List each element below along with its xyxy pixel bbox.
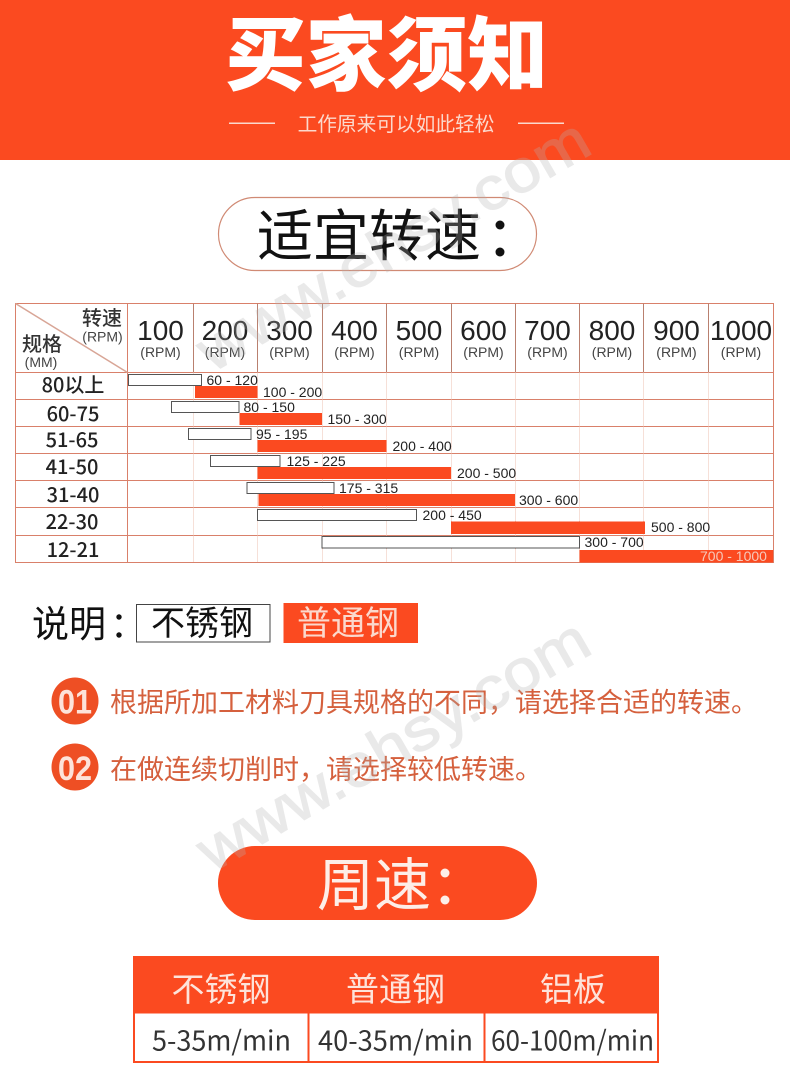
row labels — [42, 369, 104, 563]
column headers: (RPM) — [399, 344, 439, 360]
row labels: 80以上 — [42, 369, 104, 398]
column headers: 1000 — [710, 315, 772, 346]
bars: 60-75 — [172, 399, 387, 427]
column headers: (RPM) — [656, 344, 697, 360]
table values — [152, 1018, 654, 1058]
note 01: 01 — [58, 684, 92, 722]
header banner — [0, 0, 790, 160]
row labels: 12-21 — [47, 534, 99, 563]
column headers: 700 — [524, 315, 571, 346]
corner header labels: 转速 — [82, 302, 122, 331]
note 01: 根据所加工材料刀具规格的不同，请选择合适的转速。 — [110, 681, 758, 720]
row labels: 60-75 — [47, 398, 99, 427]
watermark: bottom: www.ehsy.com — [184, 605, 601, 885]
row labels: 22-30 — [46, 506, 98, 535]
table values: 60-100m/min — [491, 1018, 654, 1058]
bars: 41-50: 200 - 500 — [457, 465, 516, 481]
column headers: 400 — [331, 315, 378, 346]
column headers: (RPM) — [463, 344, 504, 360]
table headers — [172, 963, 606, 1011]
surface speed table — [133, 956, 659, 1063]
bars: 51-65: 200 - 400 — [392, 438, 452, 454]
bars: 80+ — [128, 372, 322, 400]
table headers: 普通钢 — [346, 963, 445, 1011]
column headers: 800 — [589, 315, 635, 346]
bars: 80+: 100 - 200 — [263, 384, 322, 400]
table values: 5-35m/min — [152, 1018, 291, 1058]
column headers: 100 — [137, 315, 184, 346]
row labels: 41-50 — [46, 451, 98, 480]
corner header labels — [22, 302, 123, 370]
column headers — [137, 315, 772, 360]
column headers: 200 — [202, 315, 248, 346]
bars: 51-65 — [188, 426, 452, 454]
column headers: (RPM) — [140, 344, 181, 360]
column headers: (RPM) — [205, 344, 245, 360]
column headers: 500 — [396, 315, 442, 346]
heading pill: surface speed: 周速 — [317, 840, 431, 922]
bars: 60-75: 80 - 150 — [244, 399, 295, 415]
note 02: 在做连续切削时，请选择较低转速。 — [110, 748, 542, 787]
column headers: (RPM) — [334, 344, 375, 360]
corner header labels: (RPM) — [82, 328, 123, 344]
bars: 80+: 60 - 120 — [206, 372, 258, 388]
bars: 22-30: 200 - 450 — [422, 507, 482, 523]
column headers: 900 — [653, 315, 700, 346]
column headers: (RPM) — [592, 344, 632, 360]
table headers: 不锈钢 — [172, 963, 270, 1011]
corner header labels: (MM) — [25, 354, 57, 370]
note 02: 02 — [58, 750, 92, 788]
column headers: (RPM) — [721, 344, 761, 360]
table grid — [16, 304, 774, 562]
table values: 40-35m/min — [318, 1018, 473, 1058]
bars: 41-50: 125 - 225 — [286, 453, 346, 469]
row labels: 31-40 — [47, 479, 99, 508]
column headers: 600 — [460, 315, 507, 346]
heading pill: suitable speed: 适宜转速 — [257, 192, 481, 273]
column headers: (RPM) — [269, 344, 310, 360]
bars: 12-21: 300 - 700 — [584, 534, 644, 550]
column headers: 300 — [266, 315, 313, 346]
bars: 12-21: 700 - 1000 — [700, 548, 767, 564]
bars: 51-65: 95 - 195 — [256, 426, 308, 442]
row labels: 51-65 — [46, 424, 98, 453]
bars: 60-75: 150 - 300 — [328, 411, 387, 427]
legend: 说明 — [32, 594, 106, 648]
bars: 31-40 — [247, 480, 578, 508]
corner header labels: 规格 — [22, 328, 62, 357]
bars: 31-40: 175 - 315 — [339, 480, 398, 496]
bars: 22-30: 500 - 800 — [651, 519, 710, 535]
legend: ordinary steel: 普通钢 — [297, 596, 399, 645]
bars: 22-30 — [258, 507, 710, 535]
legend — [32, 594, 418, 648]
legend: stainless steel: 不锈钢 — [151, 596, 253, 645]
table headers: 铝板 — [540, 963, 606, 1011]
bars: 31-40: 300 - 600 — [519, 492, 578, 508]
bars: 41-50 — [210, 453, 516, 481]
watermark: top: www.ehsy.com — [184, 105, 601, 385]
bars: 12-21 — [322, 534, 773, 564]
speed table — [16, 302, 774, 564]
column headers: (RPM) — [527, 344, 568, 360]
subtitle: 工作原来可以如此轻松 — [298, 108, 494, 137]
heading pill: surface speed — [218, 840, 537, 922]
